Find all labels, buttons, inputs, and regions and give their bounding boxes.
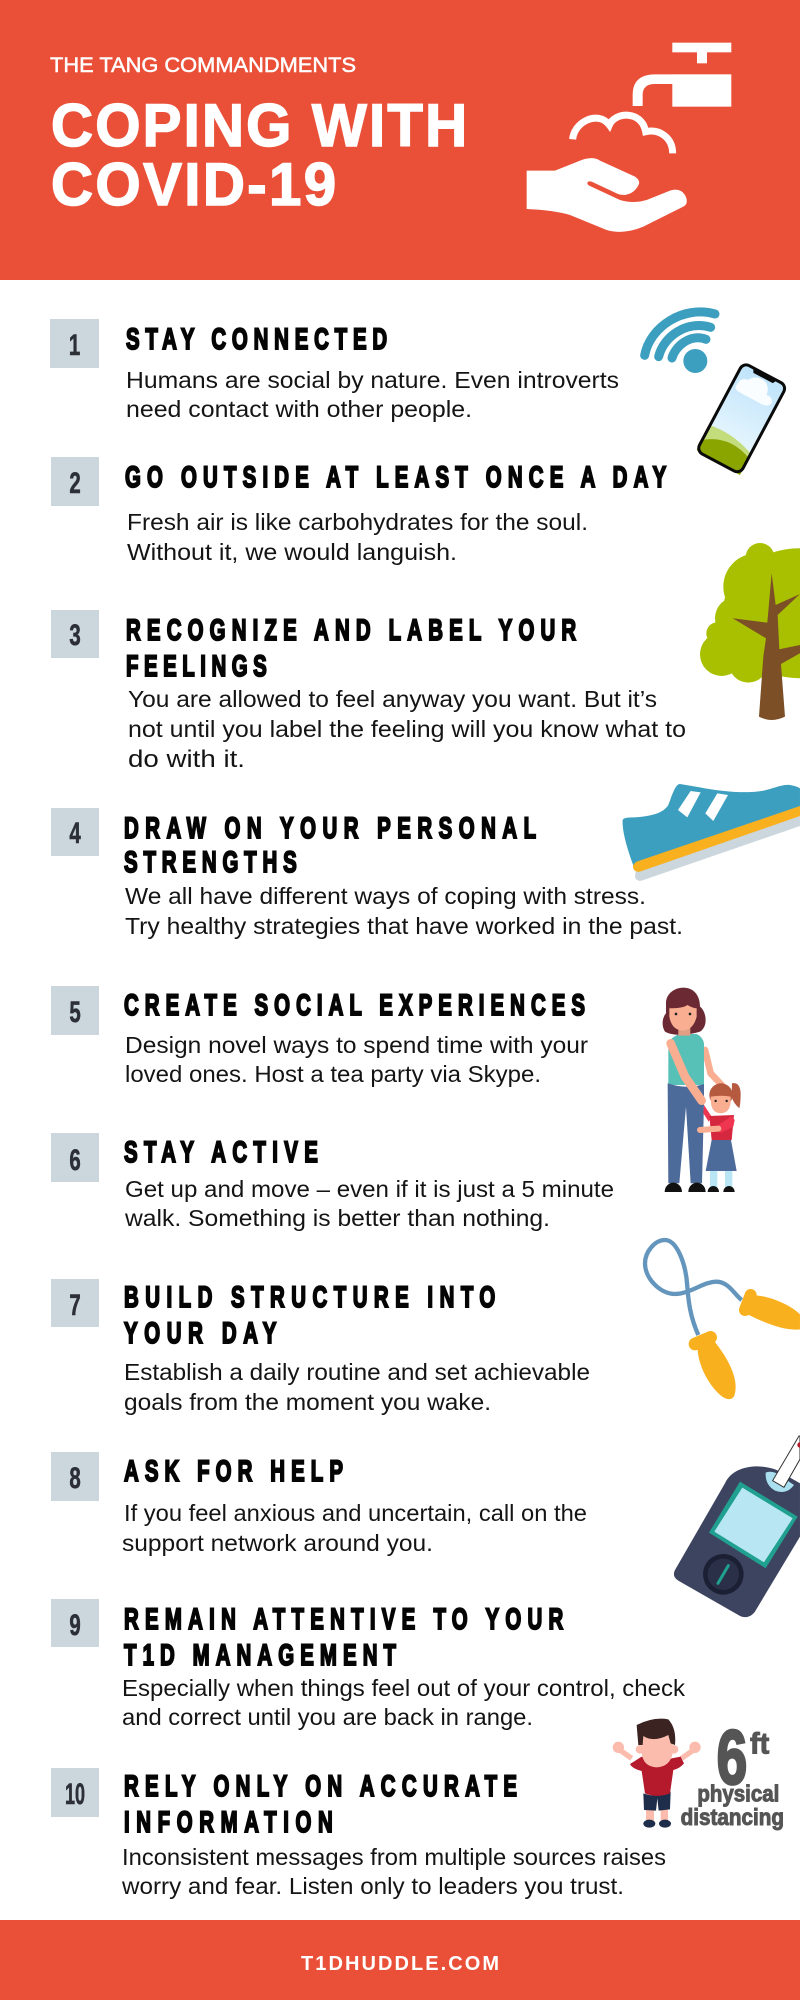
- icon: tree: [700, 543, 800, 720]
- heading: [124, 1770, 517, 1839]
- body text: not until you label the feeling will you know what to: [128, 716, 686, 742]
- step 5: create social experiences: [51, 986, 588, 1087]
- heading: BUILD STRUCTURE INTO: [124, 1281, 495, 1314]
- step 3: recognize and label your feelings: [51, 610, 686, 773]
- body text: [127, 509, 588, 565]
- body text: Especially when things feel out of your control, check: [122, 1675, 686, 1701]
- body text: [125, 883, 683, 939]
- title: [51, 91, 467, 218]
- number badge 3: 3: [69, 619, 81, 652]
- number badge 8: [51, 1452, 99, 1501]
- number badge 3: [51, 610, 99, 658]
- body text: Establish a daily routine and set achievable: [124, 1359, 590, 1385]
- heading: INFORMATION: [124, 1806, 333, 1839]
- number badge 10: 10: [65, 1779, 85, 1811]
- label: 6 ft physical distancing: physical: [697, 1781, 779, 1807]
- label: 6 ft physical distancing: ft: [750, 1727, 770, 1760]
- step 9: remain attentive: [51, 1599, 686, 1730]
- number badge 4: 4: [69, 817, 81, 850]
- step 8: ask for help: [51, 1452, 587, 1556]
- number badge 6: [51, 1133, 99, 1182]
- heading: GO OUTSIDE AT LEAST ONCE A DAY: [125, 461, 666, 494]
- step 10: rely only on accurate information: [51, 1768, 666, 1899]
- title: COVID-19: [51, 150, 336, 218]
- step 2: go outside: [51, 457, 666, 565]
- number badge 9: [51, 1599, 99, 1647]
- eyebrow: the tang commandments: THE TANG COMMANDMENTS: [50, 54, 356, 77]
- number badge 5: [51, 986, 99, 1035]
- body text: [124, 1359, 590, 1415]
- heading: [124, 1281, 495, 1350]
- icon: hand washing under faucet: [527, 43, 731, 232]
- heading: [124, 812, 536, 879]
- heading: T1D MANAGEMENT: [124, 1639, 396, 1672]
- heading: DRAW ON YOUR PERSONAL: [124, 812, 536, 845]
- heading: [124, 1603, 563, 1672]
- header banner: [0, 0, 800, 280]
- body text: Without it, we would languish.: [127, 539, 457, 565]
- body text: goals from the moment you wake.: [124, 1389, 491, 1415]
- body text: [122, 1675, 686, 1730]
- label: 6 ft physical distancing: distancing: [681, 1804, 784, 1830]
- body text: [124, 1176, 614, 1231]
- icon: wifi signal: [645, 312, 715, 373]
- heading: FEELINGS: [126, 650, 267, 683]
- number badge 1: [50, 319, 99, 368]
- step 7: build structure into your day: [51, 1279, 590, 1415]
- number badge 7: [51, 1279, 99, 1327]
- body text: and correct until you are back in range.: [122, 1704, 533, 1730]
- icon: jump rope: [645, 1240, 800, 1399]
- body text: walk. Something is better than nothing.: [124, 1205, 550, 1231]
- icon: smartphone: [695, 363, 787, 477]
- body text: [121, 1844, 666, 1899]
- body text: If you feel anxious and uncertain, call on the: [124, 1500, 587, 1526]
- body text: [126, 367, 619, 422]
- step 1: stay connected: [50, 319, 619, 422]
- body text: You are allowed to feel anyway you want. But it’s: [128, 686, 657, 712]
- heading: [126, 614, 576, 683]
- heading: RELY ONLY ON ACCURATE: [124, 1770, 517, 1803]
- body text: worry and fear. Listen only to leaders you trust.: [121, 1873, 624, 1899]
- label: 6 ft physical distancing: [681, 1715, 784, 1830]
- number badge 2: [51, 457, 99, 506]
- icon: glucose meter: [674, 1436, 800, 1617]
- body text: need contact with other people.: [126, 396, 472, 422]
- icon: 6ft physical distancing: [613, 1715, 784, 1830]
- number badge 2: 2: [69, 467, 81, 500]
- body text: Design novel ways to spend time with your: [125, 1032, 588, 1058]
- body text: We all have different ways of coping with stress.: [125, 883, 646, 909]
- icon: sneaker: [623, 784, 800, 881]
- number badge 10: [51, 1768, 99, 1817]
- footer banner: [0, 1920, 800, 2000]
- body text: [128, 686, 686, 773]
- number badge 7: 7: [69, 1289, 81, 1322]
- body text: Inconsistent messages from multiple sources raises: [122, 1844, 666, 1870]
- heading: STAY ACTIVE: [124, 1136, 318, 1169]
- heading: CREATE SOCIAL EXPERIENCES: [124, 989, 585, 1022]
- body text: [122, 1500, 587, 1556]
- title: COPING WITH: [51, 91, 467, 159]
- body text: Get up and move – even if it is just a 5 minute: [125, 1176, 614, 1202]
- body text: do with it.: [128, 746, 245, 773]
- heading: STAY CONNECTED: [126, 323, 387, 356]
- body text: support network around you.: [122, 1530, 433, 1556]
- icon: mother and child: [663, 988, 741, 1192]
- step 6: stay active: [51, 1133, 614, 1231]
- heading: STRENGTHS: [124, 846, 297, 879]
- heading: REMAIN ATTENTIVE TO YOUR: [124, 1603, 563, 1636]
- body text: [125, 1032, 588, 1087]
- step 4: draw on your personal strengths: [51, 808, 683, 939]
- number badge 8: 8: [69, 1462, 81, 1495]
- heading: YOUR DAY: [124, 1317, 276, 1350]
- label: 6 ft physical distancing: 6: [717, 1715, 747, 1801]
- number badge 5: 5: [69, 996, 81, 1029]
- number badge 4: [51, 808, 99, 856]
- number badge 1: 1: [69, 329, 80, 362]
- number badge 9: 9: [69, 1609, 81, 1642]
- footer text: T1DHUDDLE.COM: [301, 1953, 499, 1975]
- body text: Try healthy strategies that have worked in the past.: [125, 913, 683, 939]
- body text: loved ones. Host a tea party via Skype.: [125, 1061, 541, 1087]
- number badge 6: 6: [69, 1144, 81, 1177]
- body text: Humans are social by nature. Even introverts: [126, 367, 619, 393]
- heading: RECOGNIZE AND LABEL YOUR: [126, 614, 576, 647]
- body text: Fresh air is like carbohydrates for the soul.: [127, 509, 588, 535]
- heading: ASK FOR HELP: [124, 1455, 343, 1488]
